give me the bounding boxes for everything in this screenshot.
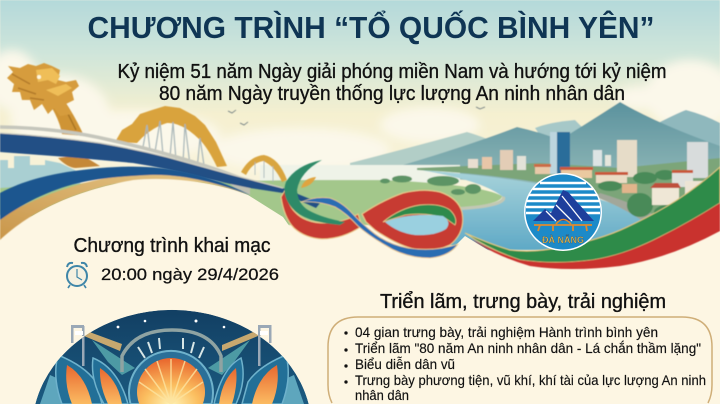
small arch: [241, 155, 287, 182]
dragon bridge: [0, 63, 320, 208]
infinity ribbon: green left: [284, 160, 345, 225]
sky: [0, 0, 720, 190]
stage towers: [82, 336, 260, 366]
left inner petal: [92, 358, 128, 404]
light beams: [84, 330, 258, 351]
subtitle: 80 năm Ngày truyền thống lực lượng An ninh nhân dân: [159, 83, 625, 105]
stage dome: [35, 310, 309, 404]
river: [380, 170, 660, 250]
subtitle: Kỷ niệm 51 năm Ngày giải phóng miền Nam và hướng tới kỷ niệm: [118, 61, 666, 83]
exhibition list: Triển lãm "80 năm An ninh nhân dân - Lá chắn thầm lặng": [355, 340, 701, 356]
city bank: [417, 158, 720, 222]
exhibition list: 04 gian trưng bày, trải nghiệm Hành trình bình yên: [355, 324, 658, 340]
emblem white stripes: [526, 183, 600, 213]
exhibition heading: Triển lãm, trưng bày, trải nghiệm: [380, 291, 666, 313]
infinity ribbon: water hole: [385, 215, 448, 235]
stars: [117, 320, 225, 328]
city buildings: [468, 132, 708, 183]
right red ribbon: [470, 203, 720, 269]
exhibition panel: [328, 317, 712, 403]
opening date and time: 20:00 ngày 29/4/2026: [101, 265, 279, 284]
houses: [622, 170, 703, 205]
infinity ribbon: red right lobe: [362, 190, 463, 250]
left blue ribbon: [0, 167, 250, 220]
landscape scene: [0, 0, 720, 250]
left city silhouette: [0, 156, 85, 195]
exhibition list: Trưng bày phương tiện, vũ khí, khí tài của lực lượng An ninh: [355, 372, 706, 388]
bridge pier: [225, 178, 250, 195]
peninsula trees: [380, 176, 481, 195]
infinity ribbon: red left lobe: [281, 190, 362, 239]
exhibition list: nhân dân: [355, 388, 409, 403]
emblem mountains: [533, 190, 594, 221]
subtitle: [118, 61, 666, 105]
sun rays: [139, 359, 203, 404]
icon: alarm clock: [67, 263, 87, 288]
dragon neck: [52, 100, 84, 136]
right outer petal: [242, 355, 288, 404]
left outer fan: [40, 375, 62, 404]
dragon body support: [58, 155, 100, 168]
dragon head: [7, 63, 79, 116]
right outer fan: [282, 375, 304, 404]
large arch: [115, 106, 227, 167]
pale far water and left green land: [260, 165, 460, 183]
birds: [228, 107, 485, 125]
bridge railing: [0, 127, 250, 182]
stage towers and spotlights: [71, 325, 272, 343]
sun: [137, 358, 205, 404]
right green ribbon: [465, 167, 720, 262]
left outer petal: [56, 355, 102, 404]
truss arch: [122, 330, 221, 372]
arch lights: [138, 338, 204, 358]
river road: [596, 193, 662, 226]
emblem bridge: [534, 225, 592, 231]
bridge deck: [0, 133, 320, 208]
lower cream area: [0, 179, 720, 404]
emblem name: ĐÀ NẴNG: [542, 234, 584, 246]
sweeping ribbons: [0, 160, 720, 269]
peninsula shore: [460, 196, 505, 210]
infinity ribbon: green inner: [383, 205, 456, 225]
infinity ribbon: blue band: [301, 198, 458, 258]
trees: [598, 170, 720, 221]
exhibition list: Biểu diễn dân vũ: [355, 356, 455, 372]
stage illustration: [35, 310, 309, 404]
title: CHƯƠNG TRÌNH “TỔ QUỐC BÌNH YÊN”: [88, 9, 654, 45]
sun ring: [129, 351, 213, 404]
opening programme heading: Chương trình khai mạc: [74, 235, 270, 257]
right inner petal: [214, 358, 243, 404]
exhibition list: [344, 324, 706, 403]
mountains: [350, 102, 720, 200]
arch cables: [143, 121, 205, 172]
left gold ribbon: [0, 173, 248, 240]
logo: Da Nang emblem: [524, 173, 602, 251]
small gold leaf: [301, 177, 316, 188]
clouds: [0, 50, 720, 172]
